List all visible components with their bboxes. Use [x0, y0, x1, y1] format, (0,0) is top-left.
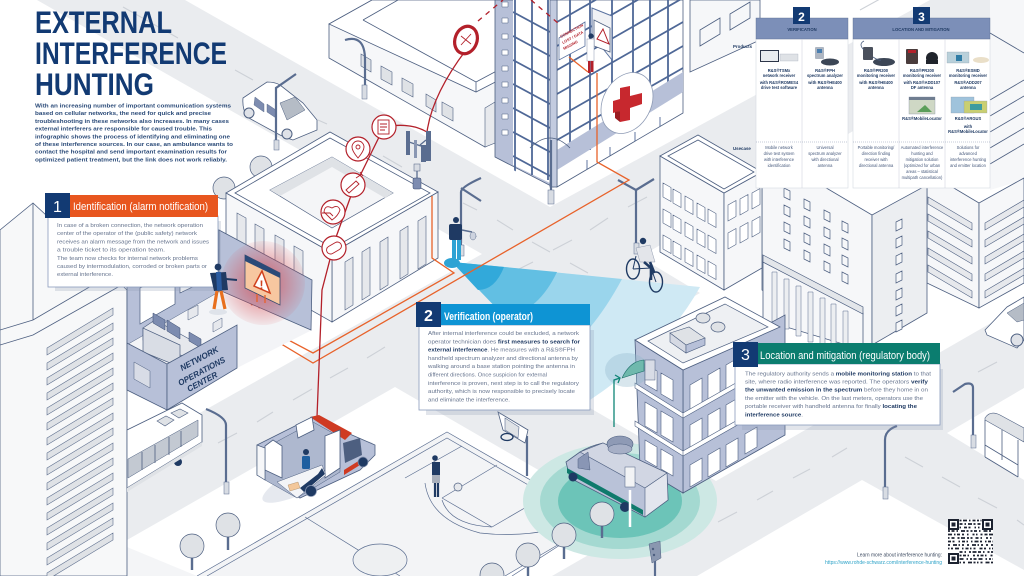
panel: step 2 verification: After internal interference could be excluded, a network [428, 331, 579, 337]
basketball court [197, 432, 600, 576]
technician with antenna [449, 217, 476, 260]
product image: PR200 with antenna [906, 49, 938, 64]
table column: location and mitigation: R&S®ARGUS [955, 116, 981, 121]
table column: location and mitigation: antenna [868, 85, 885, 90]
table column: verification: identification [768, 163, 791, 168]
hospital left face [495, 0, 553, 187]
table column: location and mitigation: monitoring receiver [857, 73, 896, 78]
warning sign in hospital [594, 20, 610, 52]
antenna tower [406, 131, 431, 189]
panel: step 3 location and mitigation: the unwanted emission in the spectrum before they home in on [745, 388, 928, 394]
top right buildings [690, 0, 1024, 190]
basketball player [432, 455, 440, 497]
traffic signal cabinet [649, 541, 661, 576]
panel: step 3 location and mitigation: 3 [741, 347, 750, 364]
NOC label panel [167, 325, 237, 410]
trees behind network building [213, 156, 272, 199]
table column: location and mitigation: monitoring receiver [903, 73, 942, 78]
table column: location and mitigation [853, 7, 990, 188]
hospital [495, 0, 683, 190]
trees [180, 502, 614, 576]
intro paragraph: based on cellular networks, the need for quick and precise [35, 111, 212, 117]
table column: location and mitigation: receiver with [865, 157, 888, 162]
tall left building [0, 203, 127, 576]
panel: step 2 verification: authority, which is now responsible to precisely locate [428, 389, 575, 395]
hospital right face [557, 0, 683, 187]
table column: verification: with interference [764, 157, 795, 162]
panel: step 2 verification: and eliminate the interference. [428, 397, 511, 403]
icon: heart rate [321, 200, 345, 224]
cyclist [626, 238, 662, 292]
NOC wall front left [127, 343, 167, 410]
product image: ESMD receiver [947, 52, 989, 63]
alarm wall with warning screen [219, 230, 312, 330]
product image: ARGUS screens [951, 97, 987, 113]
basketball hoop [498, 412, 528, 476]
table column: verification: Universal [816, 145, 834, 150]
table column: verification: with directional [811, 157, 839, 162]
panel: step 1 identification [45, 193, 221, 291]
product image: spectrum analyzer [815, 47, 839, 66]
footer link text: https://www.rohde-schwarz.com/interference-hunting [825, 560, 942, 566]
intro paragraph: optimized patient treatment, but the link does not work reliably. [35, 157, 227, 163]
panel: step 2 verification: walking around a base station pointing the antenna in [427, 364, 575, 370]
right buildings [660, 0, 1024, 350]
alarm wall with warning screen: ! [260, 278, 264, 292]
directional antenna on balcony [605, 353, 655, 387]
table column: verification [756, 7, 848, 188]
table column: location and mitigation: Automated interference [901, 145, 944, 150]
connection lost screen: CONNECTION [560, 23, 584, 39]
panel: step 2 verification: interference is proven, next step is to call the regulatory [428, 381, 579, 387]
footer link text [825, 552, 942, 566]
panel: step 1 identification: center of the operator of the (public safety) network [57, 231, 197, 237]
hospital windows room [592, 8, 612, 60]
table column: verification: R&S®TSMx [768, 68, 791, 73]
row labels: Usecase [733, 146, 751, 151]
bus [127, 403, 202, 492]
row labels [733, 44, 753, 151]
table column: location and mitigation: monitoring receiver [949, 73, 988, 78]
basketball [454, 483, 462, 491]
intro paragraph: With an increasing number of important communication systems [35, 104, 231, 110]
panel: step 2 verification [416, 302, 594, 415]
table column: location and mitigation: directional antenna [859, 163, 894, 168]
panel: step 2 verification: handheld spectrum analyzer and directional antenna by [428, 356, 578, 362]
table column: verification: with R&S®HE400 [807, 80, 842, 85]
panel: step 3 location and mitigation: The regulatory authority sends a mobile monitoring station to that [745, 371, 932, 377]
table column: location and mitigation: LOCATION AND MITIGATION [892, 27, 950, 32]
table column: location and mitigation: DF antenna [911, 85, 934, 90]
panel: step 3 location and mitigation: interference source . [745, 412, 804, 418]
panel: step 2 verification: external interference . He measures with a R&S®FPH [428, 347, 575, 354]
panel: step 3 location and mitigation [733, 342, 943, 430]
row labels: Products [733, 44, 753, 49]
panel: step 3 location and mitigation: portable receiver with handheld antenna for finally locating the [745, 404, 917, 410]
panel: step 1 identification: The team now checks for internal network problems [57, 256, 198, 262]
heading title: EXTERNAL [35, 4, 172, 40]
building: low block top centre [329, 0, 600, 147]
table column: location and mitigation: R&S®ESMD [956, 68, 980, 73]
intro paragraph: infographic shows the process of identifying and eliminating one [35, 134, 231, 140]
parked car right edge [985, 297, 1024, 348]
tower building with small windows [762, 150, 927, 350]
panel: step 2 verification: operator technician does first measures to search for [428, 339, 581, 345]
table column: verification: spectrum analyzer [807, 73, 843, 78]
heading title [35, 4, 227, 102]
parked car top left [243, 74, 317, 150]
table column: verification: Mobile network [765, 145, 794, 150]
table column: location and mitigation: R&S®PR200 [910, 68, 935, 73]
table column: location and mitigation: hunting and [911, 151, 933, 156]
table column: verification: with R&S®ROMES4 [759, 80, 799, 85]
table column: verification: network receiver [763, 73, 796, 78]
panel: step 1 identification: In case of a broken connection, the network operation [57, 223, 203, 229]
NOC label panel: NETWORK [178, 344, 221, 373]
table column: location and mitigation: mitigation solution [906, 157, 939, 162]
NOC building [226, 132, 438, 322]
table column: verification: drive test software [761, 85, 798, 90]
connection lost screen: LOST / DATA [562, 30, 584, 45]
table column: location and mitigation: areas – statistical [906, 169, 938, 174]
intro paragraph: contact the hospital and send important examination results for [35, 150, 228, 156]
table column: verification: antenna [817, 85, 834, 90]
panel: step 2 verification: different directions. Once suspicion for external [428, 372, 547, 378]
NOC label panel: OPERATIONS [176, 354, 227, 388]
table column: location and mitigation: (optimized for urban [904, 163, 941, 168]
table column: location and mitigation: R&S®ADD207 [954, 80, 982, 85]
panel: step 1 identification: a trouble ticket to its operation team. [57, 248, 166, 254]
table column: verification: antenna [818, 163, 833, 168]
table column: location and mitigation: R&S®MobileLocator [948, 129, 988, 134]
intro paragraph: troubleshooting in these networks also increases. In many cases [35, 119, 229, 125]
heading title: INTERFERENCE [35, 35, 227, 71]
low building with vertical slits [763, 255, 863, 350]
panel: step 3 location and mitigation: Location and mitigation (regulatory body) [760, 350, 930, 362]
table column: location and mitigation: Solutions for [957, 145, 980, 150]
icon: medical cross [451, 23, 481, 57]
table column: verification: VERIFICATION [787, 27, 817, 32]
intro paragraph [35, 104, 233, 163]
table column: location and mitigation: R&S®MobileLocator [902, 116, 942, 121]
table column: location and mitigation: direction finding [862, 151, 891, 156]
connection lost screen [559, 22, 585, 60]
panel: step 2 verification: 2 [424, 308, 433, 325]
table column: location and mitigation: 3 [918, 10, 925, 24]
table column: verification: drive test system [764, 151, 795, 156]
person at alarm screen [209, 264, 237, 315]
table column: location and mitigation: Portable monitoring/ [858, 145, 895, 150]
network operations centre room [127, 230, 312, 410]
table column: location and mitigation: antenna [960, 85, 977, 90]
intro paragraph: external interferers are responsible for caused trouble. This [35, 127, 212, 133]
monitoring van [566, 436, 668, 527]
far right building [927, 172, 1024, 308]
panel: step 1 identification: Identification (alarm notification) [73, 201, 208, 213]
dashed red link to hospital [478, 0, 559, 24]
panel: step 1 identification: 1 [53, 199, 62, 216]
table column: verification: 2 [798, 10, 805, 24]
footer link text: Learn more about interference hunting: [857, 552, 942, 558]
table column: location and mitigation: with R&S®HE400 [858, 80, 893, 85]
icon: pill [322, 236, 346, 260]
middle building with window grid [660, 135, 762, 290]
bus stop shelter [985, 413, 1024, 477]
table column: location and mitigation: interference hunting [950, 157, 987, 162]
orange network cables [233, 57, 629, 363]
icon: syringe [341, 172, 365, 197]
heading title: HUNTING [35, 66, 154, 102]
red cross circle [591, 63, 663, 143]
panel: step 2 verification: Verification (operator) [444, 311, 533, 323]
table column: location and mitigation: R&S®PR200 [864, 68, 889, 73]
NOC label panel: CENTER [185, 369, 219, 394]
teal signal rings [523, 443, 717, 559]
red data link and icons [317, 23, 481, 417]
table column: verification: spectrum analyzer [808, 151, 842, 156]
table column: location and mitigation: and emitter location [950, 163, 987, 168]
intro paragraph: of these interference sources. In our case, an ambulance wants to [35, 142, 233, 148]
panel: step 3 location and mitigation: the emitter with the vehicle. On the last meters, operators use the [745, 396, 923, 402]
icon: clipboard [372, 115, 396, 139]
product image: mobile locator screen [909, 97, 935, 114]
regulatory building [635, 297, 785, 493]
teal arrow upward [614, 375, 620, 427]
panel: step 3 location and mitigation: site, where radio interference was reported. The operators verify [745, 380, 929, 386]
table column: location and mitigation: advanced [959, 151, 978, 156]
connection lost screen: MISSING [563, 40, 579, 51]
lamp posts [206, 39, 976, 499]
ambulance [256, 415, 380, 513]
blue signal beam [444, 258, 700, 400]
product image: tablet and receiver [760, 50, 798, 62]
panel: step 1 identification: receives an alarm message from the network and issues [57, 239, 209, 245]
table column: location and mitigation: with [963, 124, 973, 129]
icon: map pin [346, 137, 370, 161]
doctor [587, 33, 594, 73]
product image: PR200 [861, 41, 895, 66]
panel: product table [733, 7, 990, 188]
table column: location and mitigation: multipath cancellation) [902, 175, 943, 180]
table column: verification: R&S®FPH [815, 68, 835, 73]
QR code [948, 519, 993, 564]
panel: step 1 identification: caused by intermodulation, corroded or broken parts or [57, 264, 207, 270]
panel: step 1 identification: external interference. [57, 272, 114, 278]
table column: location and mitigation: with R&S®ADD107 [903, 80, 941, 85]
